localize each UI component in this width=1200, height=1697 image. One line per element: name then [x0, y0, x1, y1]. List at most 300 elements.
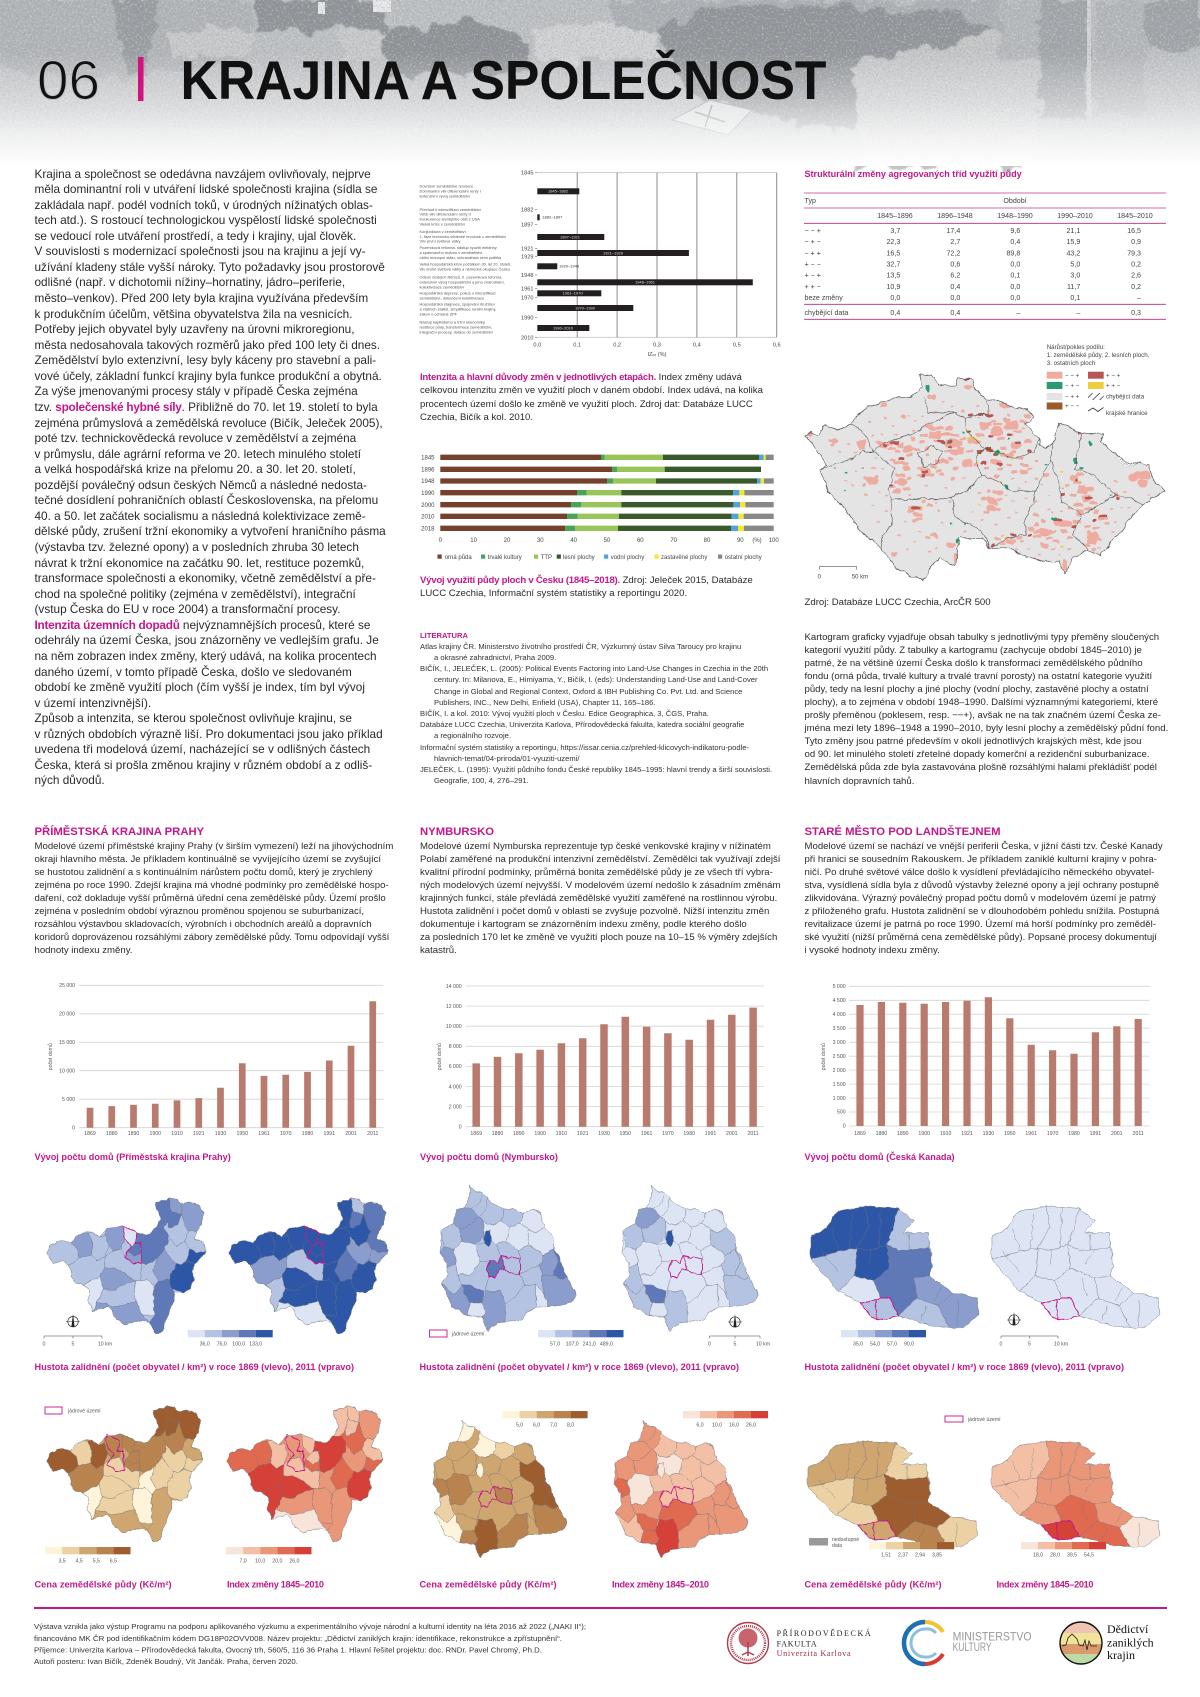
bar chart: houses Praha: 1921 [193, 1131, 205, 1137]
text: Nymbursko: Hustota zalidnění i počet domů v oblasti se zvyšuje pozvolně. Nižší intenzitu změn [420, 906, 769, 917]
map: Nymbursko change index [614, 1420, 748, 1557]
intro text column: se vedoucí role utváření prostředí, a tedy i krajiny, ujal člověk. [34, 229, 356, 243]
table rows: 0,0 [1010, 283, 1020, 291]
captions: price and index Praha: Index změny 1845–2010 [227, 1580, 324, 1590]
Kanada price and index legends: data [832, 1543, 842, 1549]
cartogram description [804, 632, 1168, 787]
table rows: 0,0 [1010, 260, 1020, 268]
table rows: 0,1 [1010, 272, 1020, 280]
row labels [421, 456, 435, 532]
intro text column: tzv. společenské hybné síly. Přibližně do 70. let 19. století to byla [34, 400, 378, 414]
bar chart: houses Ceska Kanada: 4 000 [833, 1012, 846, 1018]
map legend: Nárůst/pokles podílu: [1047, 344, 1105, 351]
map legend: − − + [1065, 372, 1080, 380]
value axis: 0,6 [773, 342, 781, 348]
map legend: 0 [818, 574, 822, 580]
Nymbursko price and index legends: 10,0 [712, 1422, 722, 1428]
literature: a regionálního rozvoje. [434, 731, 511, 740]
axis labels: (%) [752, 538, 762, 544]
text: Stare Mesto: i vysoké hodnoty indexu změny. [804, 945, 940, 956]
map: Kanada change index [992, 1441, 1160, 1547]
Praha price and index legends: jádrové území [67, 1408, 101, 1414]
Nymbursko price and index legends: 26,0 [746, 1422, 756, 1428]
Nymbursko price and index legends: 6,0 [533, 1422, 540, 1428]
year axis: 1882 [521, 207, 534, 213]
intro text column: Potřeby jejich obyvatel byly uzavřeny na úrovni mikroregionu, [34, 322, 354, 336]
text: Stare Mesto: z přiloženého grafu. Hustota zalidnění se v dlouhodobém pohledu snížila. Postupná [804, 906, 1159, 917]
bar chart: houses Ceska Kanada: 1910 [940, 1131, 951, 1137]
table rows: 13,5 [886, 272, 900, 280]
Praha density legend and scale: 10 km [98, 1342, 112, 1348]
text: Nymbursko: Polabí zaměřené na produkční intenzivní zemědělství. Zemědělci tak využívají zdejší [420, 854, 780, 865]
captions: price and index Nymbursko: Index změny 1845–2010 [612, 1580, 709, 1590]
captions: price and index Nymbursko: Cena zemědělské půdy (Kč/m²) [420, 1580, 556, 1590]
footer credits: Příjemce: Univerzita Karlova – Přírodovědecká fakulta, Ovocný trh, 560/5, 116 36 Praha 1. Hlavní řešitel projektu: doc. RNDr. Pavel Chromý, Ph.D. [34, 1646, 542, 1654]
period descriptions: Extenzivní vývoj zemědělství [420, 193, 471, 198]
map: Kanada land price [808, 1441, 978, 1547]
value axis: 0,3 [653, 342, 661, 348]
bar chart: houses Ceska Kanada: počet domů [820, 1043, 827, 1070]
caption: density Praha: Hustota zalidnění (počet obyvatel / km²) v roce 1869 (vlevo), 2011 (vpravo) [34, 1362, 354, 1372]
bar chart: houses Ceska Kanada: 1950 [1004, 1131, 1016, 1137]
bar chart: houses Nymbursko: 1970 [662, 1131, 674, 1137]
caption: intensity chart [420, 372, 763, 423]
intro text column: ných důvodů. [34, 773, 105, 787]
bar chart: houses Praha: 1930 [215, 1131, 226, 1137]
bar chart: houses Praha: 15 000 [59, 1040, 75, 1046]
map legend: 1. zemědělské půdy, 2. lesních ploch, [1047, 352, 1150, 359]
literature: a okrasné zahradnictví, Praha 2009. [434, 653, 556, 662]
cartogram description: patrné, že na většině území Česka došlo k transformaci zemědělského půdního [804, 658, 1143, 669]
row labels: 1948 [421, 479, 435, 485]
bar chart: houses Ceska Kanada: 3 000 [833, 1040, 846, 1046]
axis labels: 80 [704, 538, 711, 544]
bar chart: houses Nymbursko: 1961 [641, 1131, 652, 1137]
bar chart: houses Praha: 1900 [149, 1131, 161, 1137]
Kanada price and index legends: jádrové území [967, 1417, 1001, 1423]
value axis: 0,2 [613, 342, 621, 348]
table rows: 2,7 [950, 238, 960, 246]
intro text column [34, 166, 386, 787]
period descriptions: restituce půdy, transformace zemědělství, [420, 325, 492, 330]
Nymbursko price and index legends: 16,0 [729, 1422, 739, 1428]
intro text column: pozdější poválečný odsun českých Němců a následné nedosta- [34, 478, 367, 492]
bar chart: houses Nymbursko [436, 984, 764, 1137]
Nymbursko density legend and scale: jádrové území [451, 1332, 485, 1338]
intro text column: tech atd.). S rostoucí technologickou vyspělostí lidské společnosti [34, 213, 377, 227]
table rows: 0,2 [1131, 260, 1141, 268]
row labels: 2018 [421, 526, 435, 532]
period labels: 1921–1929 [603, 250, 624, 255]
table rows: 0,4 [890, 309, 900, 317]
intro text column: odlišné (např. v dichotomii nížiny–hornatiny, jádro–periferie, [34, 275, 345, 289]
Nymbursko density legend and scale: 0 [708, 1342, 711, 1348]
logo: Dedictvi zaniklych krajin [1060, 1622, 1154, 1665]
Praha density legend and scale: 76,0 [217, 1342, 227, 1348]
text: Stare Mesto: revitalizace území je patrná po roce 1990. Území má horší podmínky pro zeměděl- [804, 919, 1156, 930]
Kanada price and index legends: 54,5 [1084, 1552, 1094, 1558]
text: Praha: zejména v posledním období výraznou proměnou spojenou se suburbanizací, [34, 906, 364, 917]
intro text column: Za výše jmenovanými procesy stály v případě Česka zejména [34, 384, 358, 398]
table rows: − − + [804, 227, 821, 235]
axis labels: 100 [769, 538, 779, 544]
text: Praha: se hustotou zalidnění a s kontinuálním nárůstem počtu domů, který je zrychlený [34, 867, 373, 878]
heading: Nymbursko: NYMBURSKO [420, 826, 494, 838]
period labels: 1970–1990 [575, 305, 596, 310]
period descriptions: zemědělství, dokončení kolektivizace [420, 296, 485, 301]
literature: century. In: Milanova, E., Himiyama, Y., Bičík, I. (eds): Understanding Land-Use and Land-Cover [434, 675, 758, 684]
intro text column: Intenzita územních dopadů nejvýznamnějších procesů, které se [34, 618, 370, 632]
table rows: 0,4 [950, 309, 960, 317]
bar chart: houses Nymbursko: 1921 [577, 1131, 589, 1137]
period labels: 1897–1921 [560, 234, 581, 239]
table rows: 79,3 [1127, 250, 1141, 258]
row labels: 2000 [421, 503, 435, 509]
intro text column: v území intenzivnější). [34, 696, 151, 710]
intro text column: transformace společnosti a ekonomiky, včetně zemědělství a pře- [34, 571, 376, 585]
map legend: 50 km [852, 574, 868, 580]
bar chart: houses Praha: 1950 [236, 1131, 248, 1137]
captions: price and index Kanada: Index změny 1845–2010 [996, 1580, 1094, 1590]
Praha density legend and scale [43, 1314, 273, 1348]
text: Nymbursko [420, 840, 780, 956]
logo: Dedictvi zaniklych krajin: zaniklých [1107, 1636, 1154, 1650]
cartogram description: Kartogram graficky vyjadřuje obsah tabulky s jednotlivými typy přeměny sloučených [804, 632, 1159, 642]
value axis: IZₚᵣ (%) [648, 352, 667, 358]
text: Praha: okraji hlavního města. Je příkladem kontinuálně se vyvíjejícího území se zvyšující [34, 854, 381, 865]
period descriptions: Přechod k intenzifikaci zemědělství [420, 207, 482, 212]
period labels: 1961–1970 [563, 291, 583, 296]
table header: Typ [804, 197, 816, 205]
Nymbursko density legend and scale: 10 km [756, 1342, 770, 1348]
intro text column: a velká hospodářská krize na přelomu 20. a 30. let 20. století, [34, 462, 356, 476]
bar chart: houses Ceska Kanada: 3 500 [833, 1026, 846, 1032]
period descriptions: vliv druhé světové války a německá okupace Česka [420, 267, 510, 272]
Kanada density legend and scale: 5 [1028, 1342, 1031, 1348]
bar chart: houses Ceska Kanada: 1890 [897, 1131, 909, 1137]
table rows: 0,4 [1010, 238, 1020, 246]
footer rule [34, 1607, 1167, 1609]
table rows: 0,1 [1070, 294, 1080, 302]
literature: BIČÍK, I. a kol. 2010: Vývoj využití ploch v Česku. Edice Geographica, 3, ČGS, Praha. [420, 709, 709, 718]
intro text column: měla dominantní roli v utváření lidské společnosti krajina (sídla se [34, 182, 377, 196]
period descriptions: a spalovacího motoru v zemědělství, [420, 250, 483, 255]
bar chart: houses Nymbursko: 1950 [620, 1131, 631, 1137]
text: Nymbursko: katastrů. [420, 945, 457, 956]
bar chart: houses Nymbursko: 1890 [513, 1131, 525, 1137]
table rows: 16,5 [886, 250, 900, 258]
bar chart: houses Praha: 1890 [128, 1131, 139, 1137]
map legend [818, 344, 1150, 580]
table rows: 22,3 [886, 238, 900, 246]
legend: TTP [541, 555, 552, 561]
value axis: 0,5 [733, 342, 741, 348]
map legend: + − + [1106, 372, 1121, 380]
year axis: 2010 [521, 335, 534, 341]
table rows: – [1137, 294, 1141, 302]
logo: Ministry of Culture: MINISTERSTVO [953, 1632, 1032, 1644]
table rows: 9,6 [1010, 227, 1020, 235]
intro text column: V souvislosti s modernizací společnosti jsou na krajinu a její vy- [34, 244, 366, 258]
Kanada price and index legends: 1,51 [881, 1552, 891, 1558]
bar chart: houses Nymbursko: 4 000 [449, 1084, 462, 1090]
period descriptions: 1. fáze technicko-vědecké revoluce v zemědělství [420, 234, 507, 239]
bar chart: houses Praha: 2011 [367, 1131, 378, 1137]
intro text column: zejména průmyslová a zemědělská revoluce (Bičík, Jeleček 2005), [34, 416, 383, 430]
bar chart: houses Praha: 1991 [323, 1131, 335, 1137]
table rows: 0,6 [950, 260, 960, 268]
logo: Dedictvi zaniklych krajin: Dědictví [1107, 1622, 1149, 1636]
intro text column: užívání kladeny stále vyšší nároky. Tyto požadavky jsou prostorově [34, 260, 385, 274]
map legend: krajské hranice [1106, 410, 1148, 417]
year axis: 1921 [521, 246, 534, 252]
period bars [537, 188, 753, 331]
bar chart: houses Praha: 10 000 [59, 1068, 75, 1074]
panel: structural changes table [804, 169, 1166, 319]
axis labels [439, 538, 779, 544]
logo: Faculty of Science: Univerzita Karlova [777, 1649, 851, 1658]
table rows: 17,4 [946, 227, 960, 235]
Nymbursko density legend and scale: 489,0 [600, 1342, 613, 1348]
table rows: + − − [804, 260, 821, 268]
year axis [521, 171, 534, 341]
cartogram description: jména mezi lety 1896–1948 a 1990–2010, byly lesní plochy a zemědělský půdní fond. [804, 723, 1168, 734]
legend: lesní plochy [563, 555, 595, 561]
logo: Faculty of Science: PŘÍRODOVĚDECKÁ [777, 1628, 871, 1638]
caption: stacked chart: LUCC Czechia, Informační systém statistiky a reportingu 2020. [420, 588, 687, 599]
literature: Atlas krajiny ČR. Ministerstvo životního prostředí ČR, Výzkumný ústav Silva Taroucy pro krajinu [420, 642, 741, 651]
bar chart: houses Praha: 25 000 [59, 983, 75, 989]
chart: intensity of changes: 1929–1948 [559, 264, 580, 269]
title accent bar [138, 57, 144, 101]
table rows: 0,0 [890, 294, 900, 302]
literature: Geografie, 100, 4, 276–291. [434, 776, 529, 785]
bar chart: houses Praha: 1869 [84, 1131, 96, 1137]
table rows: 2,6 [1131, 272, 1141, 280]
caption: density Kanada: Hustota zalidnění (počet obyvatel / km²) v roce 1869 (vlevo), 2011 (vpravo) [804, 1362, 1124, 1372]
literature: JELEČEK, L. (1995): Využití půdního fondu České republiky 1845–1995: hlavní trendy a širší souvislosti. [420, 765, 772, 774]
Kanada price and index legends: nedostupné [832, 1537, 859, 1543]
Kanada density legend and scale: 0 [1000, 1342, 1003, 1348]
chart: intensity of changes [420, 171, 781, 358]
intro text column: města nedosahovala takových rozměrů jako před 100 lety či dnes. [34, 338, 380, 352]
table rows: 89,8 [1006, 250, 1020, 258]
table rows: 0,0 [1010, 294, 1020, 302]
text: Praha: Modelové území příměstské krajiny Prahy (v širším vymezení) leží na jihovýchodním [34, 840, 393, 852]
table header: 1990–2010 [1057, 212, 1093, 220]
intro text column: Zemědělství bylo extenzivní, lesy byly káceny pro stavební a pali- [34, 353, 376, 367]
map legend: chybějící data [1106, 394, 1145, 401]
table rows: 0,0 [950, 294, 960, 302]
legend [438, 554, 762, 561]
Nymbursko price and index legends [503, 1411, 768, 1428]
value axis: 0,4 [693, 342, 701, 348]
intro text column: v různých obdobích výrazně liší. Pro dokumentaci jsou jako příklad [34, 727, 383, 741]
table rows: 32,7 [886, 260, 900, 268]
intro text column: k produkčním účelům, většina obyvatelstva žila na vesnicích. [34, 307, 353, 321]
map: Kanada density 1869 [811, 1206, 979, 1328]
cartogram description: od 90. let minulého století zřetelné dopady komerční a rezidenční suburbanizace. [804, 749, 1150, 760]
table rows: chybějící data [804, 309, 848, 317]
bar chart: houses Ceska Kanada: 1 500 [833, 1082, 846, 1088]
caption: stacked chart [420, 574, 753, 599]
text: Nymbursko: Modelové území Nymburska reprezentuje typ české venkovské krajiny v nížinatém [420, 840, 771, 852]
legend: vodní plochy [611, 555, 644, 561]
table rows: – [1076, 309, 1080, 317]
intro text column: město–venkov). Před 200 lety byla krajina využívána především [34, 291, 368, 305]
table rows: − + − [804, 238, 821, 246]
bar chart: houses Ceska Kanada: 1980 [1068, 1131, 1080, 1137]
map: Praha density 1869 [47, 1198, 207, 1334]
bar chart: houses Ceska Kanada: 2011 [1133, 1131, 1144, 1137]
table header: 1948–1990 [997, 212, 1033, 220]
bar chart: houses Nymbursko: 1930 [598, 1131, 610, 1137]
caption: intensity chart: celkovou intenzitu změn ve využití ploch v daném období. Index udává, na kolika [420, 385, 763, 396]
cartogram description: hlavních dopravních tahů. [804, 776, 914, 787]
main title: KRAJINA A SPOLEČNOST [180, 50, 826, 111]
period descriptions: Konjunktura v zemědělství [420, 229, 467, 234]
intro text column: daného území, v tomto případě Česka, došlo ve sledovaném [34, 664, 352, 678]
period labels: 1990–2010 [553, 325, 574, 330]
bar chart: houses Praha: 1910 [171, 1131, 183, 1137]
Praha price and index legends: 26,0 [289, 1558, 300, 1564]
Kanada price and index legends: 3,85 [932, 1552, 942, 1558]
table rows: 5,0 [1070, 260, 1080, 268]
bar chart: houses Praha [47, 983, 383, 1137]
cartogram description: půdy, tedy na lesní plochy a jiné plochy (vodní plochy, zastavěné plochy a ostatní [804, 684, 1149, 695]
intro text column: Česka, která si prošla změnou krajiny v různém období a z odliš- [34, 758, 372, 772]
Nymbursko density legend and scale: 107,0 [566, 1342, 579, 1348]
text: Stare Mesto [804, 840, 1163, 956]
intro text column: dělské půdy, zrušení tržní ekonomiky a vytvoření hraničního pásma [34, 524, 386, 538]
Praha price and index legends: 7,0 [239, 1558, 247, 1564]
bar chart: houses Praha: počet domů [47, 1043, 54, 1070]
caption: intensity chart: procentech území došlo ke změně ve využití ploch. Zdroj dat: Databáze LUCC [420, 399, 753, 410]
captions: price and index Kanada [804, 1580, 1094, 1590]
intro text column: (vstup Česka do EU v roce 2004) a transformační procesy. [34, 602, 340, 616]
period descriptions: Větší vliv diferenciální renty II [420, 212, 471, 217]
bar chart: houses Praha: 1980 [302, 1131, 313, 1137]
intro text column: uvedena tři modelová území, nacházející se v odlišných částech [34, 742, 370, 756]
period descriptions: extenzivní vývoj hospodářství a jeho znárodnění, [420, 279, 505, 284]
caption: houses Nymbursko: Vývoj počtu domů (Nymbursko) [420, 1152, 558, 1162]
row labels: 1896 [421, 468, 435, 474]
axis labels: 60 [637, 538, 644, 544]
cartogram description: plochy), a to zejména v období 1948–1990. Dalšími významnými kategoriemi, které [804, 697, 1158, 708]
bar chart: houses Ceska Kanada: 1930 [983, 1131, 994, 1137]
table rows: + − + [804, 272, 821, 280]
table rows: 10,9 [886, 283, 900, 291]
period descriptions: Hospodářská deprese, pokus o intenzifikaci [420, 291, 496, 296]
legend: orná půda [445, 554, 472, 561]
bar chart: houses Nymbursko: 14 000 [446, 984, 462, 990]
Kanada price and index legends: 28,0 [1050, 1552, 1060, 1558]
table rows: + + − [804, 283, 821, 291]
Nymbursko density legend and scale: 241,0 [583, 1342, 596, 1348]
bar chart: houses Nymbursko: 1880 [492, 1131, 503, 1137]
intro text column: období ke změně využití ploch (čím vyšší je index, tím byl vývoj [34, 680, 365, 694]
table header: 1845–2010 [1117, 212, 1153, 220]
map: Nymbursko land price [433, 1420, 567, 1557]
text: Nymbursko: dokumentuje i kartogram se znázorněním indexu změny, podle kterého došlo [420, 919, 747, 930]
table header [804, 197, 1153, 220]
Praha density legend and scale: 133,0 [249, 1342, 262, 1348]
cartogram description: prošly přeměnou (poklesem, resp. −−+), avšak ne na tak značném území Česka ze- [804, 710, 1161, 721]
bar chart: houses Nymbursko: 2011 [748, 1131, 759, 1137]
table rows: 21,1 [1066, 227, 1080, 235]
period descriptions: Hospodářská stagnace, spojování družstev [420, 302, 495, 307]
Praha price and index legends [45, 1407, 312, 1564]
legend: zastavěné plochy [661, 555, 707, 561]
bar chart: houses Nymbursko: 6 000 [449, 1064, 462, 1070]
Kanada density legend and scale: 90,0 [904, 1342, 914, 1348]
Praha price and index legends: 6,5 [110, 1558, 117, 1564]
caption: density Nymbursko: Hustota zalidnění (počet obyvatel / km²) v roce 1869 (vlevo), 2011 (vpravo) [420, 1362, 739, 1372]
table rows: 72,2 [946, 250, 960, 258]
literature: Change in Global and Regional Context, Oxford & IBH Publishing Co. Pvt. Ltd. and Science [434, 687, 742, 696]
map: Nymbursko density 1869 [440, 1185, 576, 1331]
intro text column: Způsob a intenzita, se kterou společnost ovlivňuje krajinu, se [34, 711, 352, 725]
bar chart: houses Nymbursko: 0 [459, 1124, 462, 1130]
bar chart: houses Nymbursko: 1869 [470, 1131, 482, 1137]
Nymbursko price and index legends: 7,0 [550, 1422, 557, 1428]
bar chart: houses Ceska Kanada: 1970 [1047, 1131, 1058, 1137]
table rows: 15,9 [1066, 238, 1080, 246]
literature [420, 630, 772, 785]
bar chart: houses Ceska Kanada: 1869 [854, 1131, 866, 1137]
Praha density legend and scale: 100,0 [232, 1342, 245, 1348]
Kanada price and index legends: 2,37 [898, 1552, 908, 1558]
bar chart: houses Nymbursko: 1900 [534, 1131, 546, 1137]
period descriptions: integrační procesy, dotace do zemědělství [420, 330, 494, 335]
period descriptions [420, 184, 511, 335]
bar chart: houses Ceska Kanada: 1 000 [833, 1096, 846, 1102]
period descriptions: Vleklá krize v zemědělství [420, 222, 466, 227]
value axis [533, 342, 781, 358]
map: Kanada density 2011 [992, 1206, 1160, 1328]
intro text column: na něm zobrazen index změny, který udává, na kolika procentech [34, 649, 377, 663]
bar chart: houses Praha: 5 000 [62, 1097, 75, 1103]
bar chart: houses Praha: 0 [72, 1125, 75, 1131]
table rows [804, 227, 1141, 317]
captions: price and index Praha: Cena zemědělské půdy (Kč/m²) [34, 1580, 172, 1590]
map legend: − + + [1065, 394, 1080, 401]
caption: intensity chart: Intenzita a hlavní důvody změn v jednotlivých etapách. Index změny udává [420, 372, 742, 383]
heading: Praha: PŘÍMĚSTSKÁ KRAJINA PRAHY [34, 826, 204, 838]
legend: ostatní plochy [725, 555, 762, 561]
period descriptions: Velká hospodářská krize počátkem 30. let 20. století, [420, 262, 511, 267]
logo: Ministry of Culture [904, 1622, 1032, 1664]
bar chart: houses Ceska Kanada: 1921 [961, 1131, 973, 1137]
period descriptions: zákon o ochraně ZPF [420, 312, 458, 317]
chart: intensity of changes: 1882–1897 [542, 215, 563, 220]
table rows: 0,4 [950, 283, 960, 291]
table rows: − + + [804, 250, 821, 258]
row labels: 1845 [421, 456, 435, 462]
Kanada density legend and scale: 10 km [1054, 1342, 1068, 1348]
period labels [548, 189, 656, 330]
value axis: 0,0 [533, 342, 541, 348]
intro text column: poté tzv. technickovědecká revoluce v zemědělství a zejména [34, 431, 356, 445]
map: Praha density 2011 [229, 1198, 389, 1334]
map: Praha land price [47, 1406, 204, 1542]
period descriptions: obilní monopol státu, ochranářská celní politika [420, 255, 502, 260]
table rows: 16,5 [1127, 227, 1141, 235]
bar chart: houses Ceska Kanada: 2 500 [833, 1054, 846, 1060]
bar chart: houses Praha: 20 000 [59, 1012, 75, 1018]
intro text column: Krajina a společnost se odedávna navzájem ovlivňovaly, nejprve [34, 166, 371, 180]
intro text column: návrat k tržní ekonomice na začátku 90. let, restituce pozemků, [34, 556, 364, 570]
